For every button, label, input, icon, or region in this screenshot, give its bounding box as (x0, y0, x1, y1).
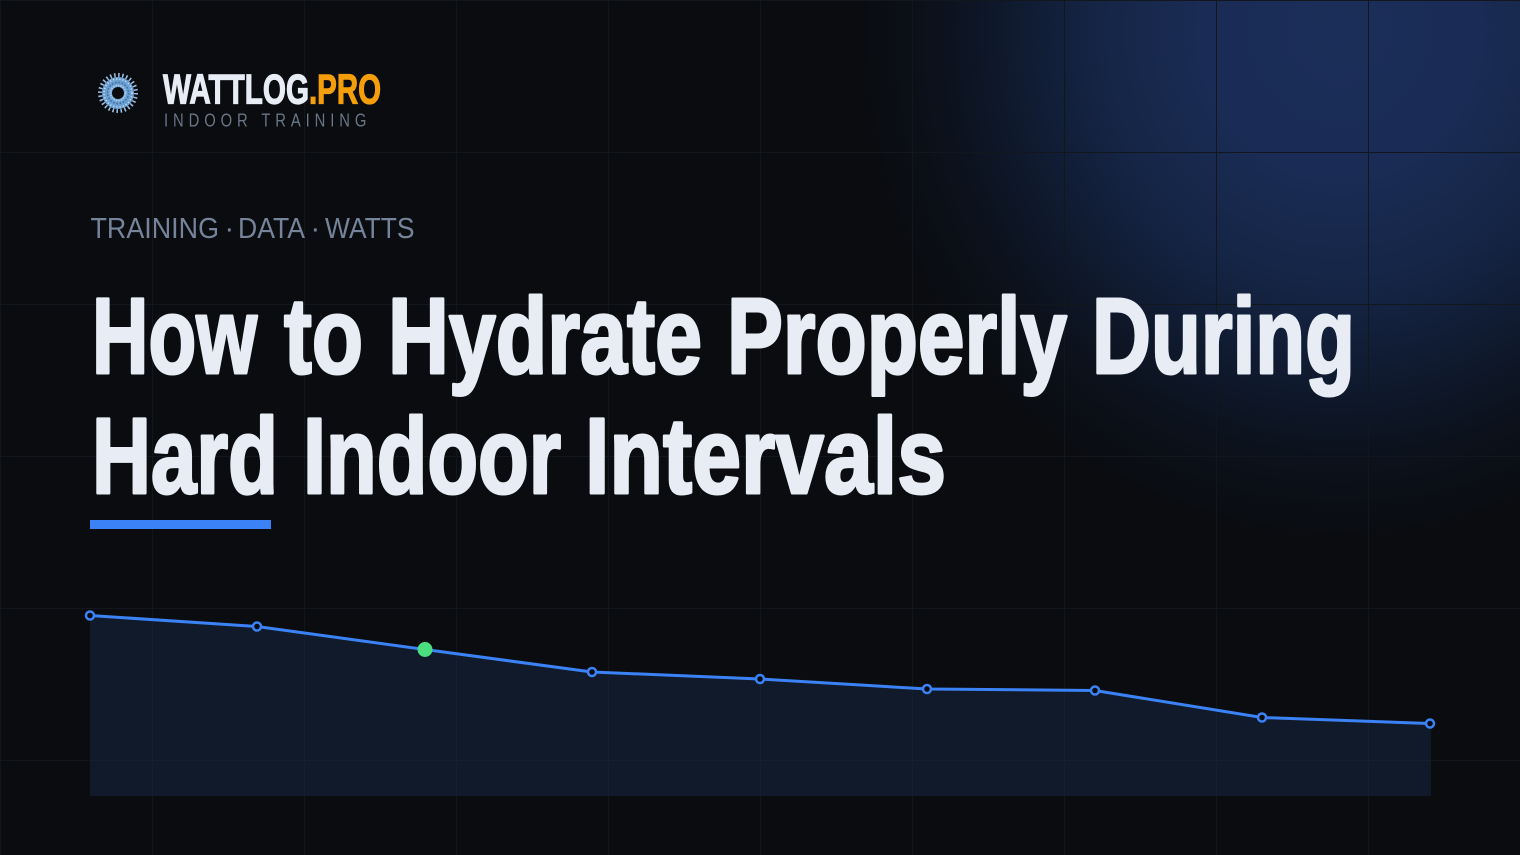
eyebrow label (90, 213, 414, 245)
logo tagline: INDOOR TRAINING (164, 110, 366, 131)
separator dot 1: · (224, 213, 234, 245)
title line 2 (92, 395, 946, 516)
title line 1: How (92, 275, 258, 396)
logo wordmark (163, 66, 381, 112)
separator dot 2: · (310, 213, 320, 245)
icon: cassette gear logo (100, 75, 136, 111)
title accent underline (90, 520, 271, 529)
wordmark: WATTLOG: WATTLOG (163, 66, 309, 112)
eyebrow word 3: WATTS (325, 213, 414, 245)
wordmark: .PRO: .PRO (309, 66, 381, 112)
title line 2: Hard (92, 395, 278, 516)
title line 2: Indoor (303, 395, 561, 516)
title line 1: Properly (727, 275, 1067, 396)
title (92, 275, 1355, 516)
chart data points (86, 612, 1434, 728)
title line 1 (92, 275, 1355, 396)
eyebrow word 1: TRAINING (90, 213, 219, 245)
eyebrow word 2: DATA (238, 213, 306, 245)
line chart (86, 612, 1434, 796)
chart line (90, 616, 1430, 724)
chart area fill (90, 616, 1431, 796)
title line 1: During (1092, 275, 1355, 396)
title line 1: to (284, 275, 363, 396)
title line 1: Hydrate (388, 275, 702, 396)
highlighted data point (418, 642, 432, 657)
title line 2: Intervals (585, 395, 946, 516)
